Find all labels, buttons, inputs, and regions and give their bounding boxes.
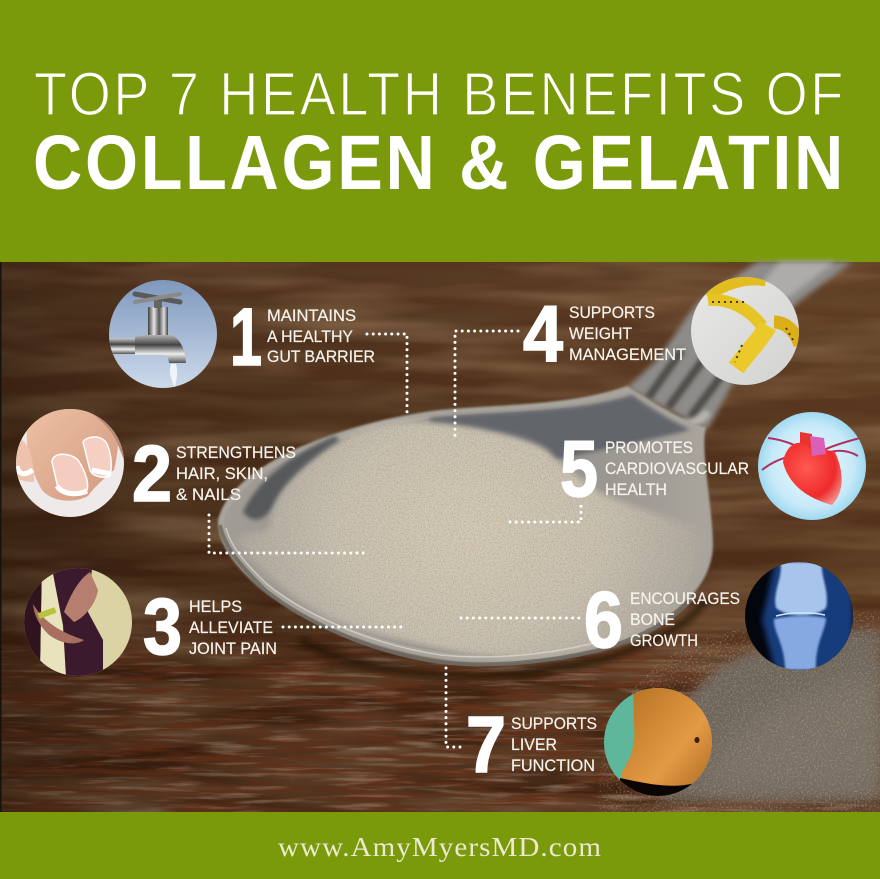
connector dots 1 bbox=[367, 334, 407, 414]
label 2: HAIR, SKIN, bbox=[176, 465, 268, 483]
label 5: PROMOTES bbox=[605, 439, 693, 457]
label 3: JOINT PAIN bbox=[189, 640, 277, 658]
number 3: 3 bbox=[143, 582, 182, 671]
label 2 bbox=[176, 444, 296, 504]
label 3: HELPS bbox=[189, 598, 242, 616]
benefit 3: joint pain bbox=[24, 568, 403, 677]
number 4: 4 bbox=[523, 289, 563, 378]
label 4: WEIGHT bbox=[569, 325, 632, 343]
label 2: & NAILS bbox=[176, 486, 241, 504]
label 7: FUNCTION bbox=[511, 757, 595, 775]
benefit 1: gut barrier bbox=[109, 280, 407, 414]
label 4 bbox=[569, 304, 686, 364]
icon: abdomen bbox=[604, 688, 712, 800]
spoon bowl bbox=[218, 386, 713, 664]
label 7: LIVER bbox=[511, 736, 557, 754]
icon: hands on knee bbox=[24, 568, 132, 677]
connector dots 6 bbox=[461, 616, 581, 620]
icon: water tap bbox=[109, 280, 217, 388]
label 1: A HEALTHY bbox=[267, 328, 353, 346]
number 2: 2 bbox=[132, 429, 172, 518]
connector dots 5 bbox=[510, 505, 581, 522]
label 6: ENCOURAGES bbox=[630, 590, 740, 608]
spoon bbox=[218, 262, 852, 675]
spoon rim highlight bbox=[220, 525, 695, 664]
benefit 7: liver function bbox=[446, 668, 712, 800]
benefit 6: bone growth bbox=[461, 562, 853, 670]
label 3: ALLEVIATE bbox=[189, 619, 273, 637]
label 1 bbox=[267, 307, 375, 366]
label 5 bbox=[605, 439, 749, 499]
connector dots 3 bbox=[283, 626, 403, 628]
number 6: 6 bbox=[584, 575, 623, 664]
label 1: MAINTAINS bbox=[267, 307, 356, 325]
label 3 bbox=[189, 598, 277, 658]
label 6: BONE bbox=[630, 611, 675, 629]
spoon handle bbox=[627, 262, 852, 430]
powder pile at bottom right bbox=[599, 612, 880, 812]
icon: knee x-ray bbox=[745, 562, 853, 670]
label 5: CARDIOVASCULAR bbox=[605, 460, 749, 478]
panel: footer banner bbox=[0, 812, 880, 879]
benefit 2: hair, skin and nails bbox=[14, 409, 366, 553]
label 4: SUPPORTS bbox=[569, 304, 655, 322]
powder in bowl bbox=[236, 422, 700, 658]
label 4: MANAGEMENT bbox=[569, 346, 686, 364]
number 7: 7 bbox=[466, 700, 506, 789]
photo panel: wooden table with spoon of powder bbox=[0, 262, 880, 812]
website url: www.AmyMyersMD.com bbox=[278, 832, 602, 862]
benefit 4: weight management bbox=[455, 277, 800, 441]
icon: heart bbox=[758, 412, 866, 520]
label 2: STRENGTHENS bbox=[176, 444, 296, 462]
number 5: 5 bbox=[560, 424, 598, 513]
photo frame edge bbox=[0, 262, 2, 812]
label 7: SUPPORTS bbox=[511, 715, 597, 733]
connector dots 4 bbox=[455, 331, 518, 441]
connector dots 2 bbox=[209, 515, 366, 553]
icon: measuring tape bbox=[691, 277, 800, 385]
benefit 5: cardiovascular health bbox=[510, 412, 866, 522]
label 5: HEALTH bbox=[605, 481, 667, 499]
connector dots 7 bbox=[446, 668, 463, 747]
label 7 bbox=[511, 715, 597, 775]
spoon bowl shadow on table bbox=[300, 600, 705, 675]
spoon shadow wedges bbox=[430, 395, 690, 460]
label 6: GROWTH bbox=[630, 632, 698, 650]
number 1: 1 bbox=[230, 292, 262, 383]
panel: header banner bbox=[0, 0, 880, 262]
label 1: GUT BARRIER bbox=[267, 348, 375, 366]
label 6 bbox=[630, 590, 740, 650]
icon: manicured nails bbox=[14, 409, 124, 517]
